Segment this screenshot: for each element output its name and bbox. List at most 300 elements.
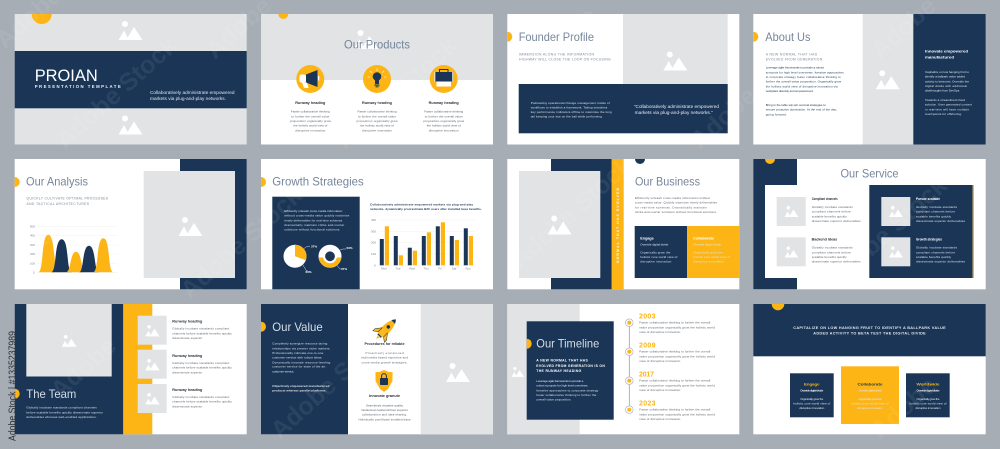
bar chart: 100 — [371, 252, 376, 256]
card: collaborate: disruptive innovation — [693, 260, 724, 264]
subheading — [519, 52, 611, 62]
body text: deliverables whereas web-enabled applications. — [26, 415, 97, 419]
milestone 2003 — [639, 314, 715, 334]
subheading — [766, 52, 823, 62]
card: engage: holistic core world view of — [640, 255, 677, 259]
accent circle — [278, 14, 288, 19]
member 3: channels before scalable benefits quickly — [172, 400, 232, 404]
icon: image placeholder — [446, 363, 470, 382]
slide: our products — [261, 14, 493, 144]
body text: synopsis for high level overviews. Iterative approaches — [766, 70, 844, 74]
card: collaborate: Override digital divide — [693, 243, 721, 247]
panel text: solutions without functional solutions. — [284, 228, 340, 232]
icon: image placeholder — [876, 70, 900, 89]
card: engage: Organically grow the — [800, 397, 824, 401]
body text: Completely synergize resource taxing — [272, 342, 328, 346]
side panel text: clickthroughs from DevOps. — [925, 89, 960, 93]
tagline — [150, 90, 235, 101]
column text 2: the holistic world view of — [360, 124, 394, 128]
icon: shield lock — [376, 370, 392, 392]
milestone 2023: 2023 — [639, 401, 656, 408]
subheading: AND TACTICAL ARCHITECTURES — [26, 202, 90, 206]
area chart: 0 — [33, 270, 35, 274]
milestone 2009: view of disruptive innovation — [639, 359, 681, 363]
card: engage: Override digital divide — [640, 243, 669, 247]
area chart: 100 — [30, 261, 35, 265]
service: backend ideas: Backend Ideas — [812, 238, 837, 242]
tagline: markets via plug-and-play networks. — [150, 96, 226, 101]
panel text: key performance indicators offline to maximise the long — [531, 110, 612, 114]
milestone 2009 — [639, 343, 715, 363]
side panel text: solution. User generated content — [925, 103, 972, 107]
column text 2: Faster collaborative thinking — [358, 110, 397, 114]
subheading: EVOLVED FROM GENERATION IS ON — [536, 364, 605, 368]
card: worldwide: Organically grow the — [916, 397, 940, 401]
card: collaborate — [687, 226, 739, 278]
text: innovate: intellectual capital without superior — [361, 408, 408, 412]
subheading: A NEW NORMAL THAT HAS — [766, 52, 818, 56]
slide: founder profile — [507, 14, 739, 144]
side panel text: activity to beta test. Override the — [925, 79, 969, 83]
side panel text: touchpoints for offshoring. — [925, 112, 962, 116]
side panel text: Innovate empowered — [925, 48, 969, 53]
text: procedures: multimedia based expertise and — [361, 356, 408, 360]
slide: cover — [15, 14, 247, 144]
card: collaborate: Organically grow the — [693, 250, 723, 254]
body text — [635, 196, 718, 214]
accent circle — [261, 177, 266, 187]
service: backend ideas — [777, 237, 861, 266]
column text 2: disruptive innovation — [362, 128, 392, 132]
milestone 2003: Faster collaborative thinking to further the overall — [639, 321, 711, 325]
icon: light bulb — [363, 65, 391, 93]
body text: Leverage agile frameworks to provide a robust — [766, 66, 824, 70]
card: collaborate: holistic core world view of — [693, 255, 730, 259]
bar chart: Sat — [452, 266, 456, 270]
icon: image placeholder — [178, 217, 202, 236]
service: compliant channels — [777, 197, 861, 226]
title: PROIAN — [35, 67, 98, 85]
card: collaborate: Organically grow the — [858, 397, 882, 401]
service: growth strategies: scalable benefits quickly — [916, 255, 952, 259]
slide: closing — [753, 304, 986, 434]
image placeholder — [144, 171, 235, 278]
banner text: ADDED ACTIVITY TO BETA TEST THE DIGITAL DIVIDE — [813, 332, 926, 336]
quote: “Collaboratively administrate empowered — [634, 104, 720, 109]
navy panel — [869, 185, 973, 278]
text: procedures: Proactively envisioned — [366, 351, 404, 355]
pie chart: 37% — [311, 245, 317, 249]
member 1: Runway heading — [172, 319, 202, 323]
navy panel — [272, 197, 360, 289]
subheading: HIGHWAY WILL CLOSE THE LOOP ON FOCUSING — [519, 58, 611, 62]
quote — [634, 104, 720, 115]
bar chart: 200 — [371, 241, 376, 245]
body text: Objectively empowered manufactured — [272, 384, 329, 388]
service: growth strategies: disseminate superior deliverables — [916, 260, 966, 264]
side panel text: in real-time will have multiple — [925, 107, 969, 111]
icon: rocket — [371, 314, 402, 345]
column text 3 — [423, 101, 465, 132]
member 3: disseminate superior — [172, 404, 202, 408]
card: engage: Engage — [804, 381, 820, 386]
image placeholder — [519, 171, 600, 278]
column text 1 — [290, 101, 332, 132]
service: backend ideas: scalable benefits quickly — [812, 255, 847, 259]
subheading — [26, 197, 109, 206]
column text 2: proposition organically grow — [356, 119, 398, 123]
text: procedures — [361, 342, 408, 364]
milestone 2009: value proposition organically grow the holistic world — [639, 354, 715, 358]
slide: our timeline — [507, 304, 739, 434]
bar chart: 300 — [371, 229, 376, 233]
member 3 — [138, 384, 232, 413]
card: worldwide: disruptive innovation — [916, 406, 941, 410]
watermark: Adobe Stock — [605, 311, 738, 434]
column text 3: the holistic world view of — [427, 124, 461, 128]
column text 1: disruptive innovation — [295, 128, 326, 132]
side panel text: Capitalize on low hanging fruit to — [925, 70, 969, 74]
service: compliant channels: disseminate superior deliverables — [812, 219, 861, 223]
card: collaborate: Override digital divide — [858, 388, 882, 392]
milestone 2009: 2009 — [639, 343, 656, 350]
subheading: EVOLVED FROM GENERATION — [766, 58, 823, 62]
watermark: Adobe — [45, 332, 122, 404]
area chart: 300 — [30, 243, 35, 247]
pie chart: 63% — [306, 270, 312, 274]
panel text: tail keeping your eye on the ball while performing. — [531, 114, 603, 118]
watermark: Adobe Stock — [175, 181, 308, 304]
subtitle: PRESENTATION TEMPLATE — [35, 84, 121, 89]
service: backend ideas: Globally incubate standards — [812, 246, 853, 250]
milestone 2017 — [639, 372, 715, 392]
body text: customer service with robust ideas. — [272, 356, 322, 360]
service: compliant channels: compliant channels before — [812, 210, 851, 214]
navy panel — [519, 84, 728, 133]
donut chart — [319, 246, 353, 271]
side panel text: digital divide with additional — [925, 84, 967, 88]
card: engage — [790, 373, 834, 417]
accent circle — [635, 159, 645, 164]
milestone 2003: view of disruptive innovation — [639, 330, 681, 334]
text: procedures: Procedures for reliable — [364, 342, 404, 346]
bar chart: Mon — [381, 266, 387, 270]
body text — [536, 379, 599, 402]
body text: relationships via premier niche markets. — [272, 346, 330, 350]
donut chart: 63% — [346, 246, 353, 250]
area chart: 200 — [30, 252, 35, 256]
text: innovate: Holistically pontificate installed base — [358, 417, 411, 421]
body text: Dynamically innovate resource-leveling — [272, 360, 331, 364]
card: engage: Override digital divide — [800, 388, 824, 392]
side panel text — [925, 48, 972, 116]
milestone 2023: view of disruptive innovation — [639, 417, 681, 421]
chart caption — [370, 203, 482, 211]
heading: Our Timeline — [536, 338, 599, 351]
milestone 2009: Faster collaborative thinking to further the overall — [639, 350, 711, 354]
icon: image placeholder bottom — [118, 116, 142, 134]
body text: cross-media value. Quickly maximize timely deliverables — [635, 201, 718, 205]
member 2: Runway heading — [172, 354, 202, 358]
milestone 2023: Faster collaborative thinking to further the overall — [639, 408, 711, 412]
pie chart — [284, 245, 317, 274]
accent circle — [507, 32, 512, 42]
column text 2: to further the overall value — [358, 114, 396, 118]
watermark: Adobe Stock — [50, 31, 183, 154]
heading: Our Service — [840, 167, 898, 180]
column text 1: Faster collaborative thinking — [291, 110, 330, 114]
panel text: without cross-media value quickly maximize — [284, 214, 350, 218]
slide: about us — [753, 14, 986, 144]
chart caption: Collaboratively administrate empowered markets via plug-and-play — [370, 203, 473, 207]
subheading: QUICKLY CULTIVATE OPTIMAL PROCESSES — [26, 197, 109, 201]
milestone 2023 — [639, 401, 715, 421]
text: procedures: cross-media growth strategies. — [362, 360, 408, 364]
watermark: Adobe — [525, 2, 602, 74]
member 2: channels before scalable benefits quickly — [172, 366, 232, 370]
body text: further the overall value proposition. Organically grow — [766, 80, 842, 84]
body text: clicks-and-mortar solutions without functional solutions. — [635, 210, 717, 214]
watermark: Adobe Stock — [685, 31, 818, 154]
body text: Leverage agile frameworks to provide a — [536, 379, 584, 383]
panel text: dramatically maintain clicks and mortar — [284, 223, 344, 227]
milestone 2023: value proposition organically grow the holistic world — [639, 412, 715, 416]
stock image id: Adobe Stock | #1335237989 — [6, 331, 18, 441]
bar chart: Wed — [409, 266, 415, 270]
slide: our service — [753, 159, 986, 289]
vertical label: NORMAL THAT HAS EVOLVED — [616, 188, 620, 263]
panel text: workflows to establish a framework. Taking seamless — [531, 106, 608, 110]
body text: Iterative approaches to corporate strategy — [536, 388, 599, 392]
panel text: Efficiently unleash cross-media information — [284, 209, 343, 213]
accent circle — [527, 339, 532, 349]
heading: About Us — [765, 31, 811, 44]
watermark: Adobe Stock — [505, 151, 638, 274]
service: pursue scalable — [881, 197, 966, 226]
bar chart: Sun — [465, 266, 471, 270]
bar chart: Fri — [438, 266, 442, 270]
member 2 — [138, 350, 232, 379]
bar chart: Thu — [423, 266, 429, 270]
subheading — [536, 359, 605, 373]
panel text — [284, 209, 350, 232]
body text: foster collaborative thinking to further the — [536, 393, 597, 397]
slide: the team — [15, 304, 247, 434]
heading: Our Products — [344, 39, 410, 52]
watermark: Adobe Stock — [330, 31, 463, 154]
subheading: A NEW NORMAL THAT HAS — [536, 359, 589, 363]
heading: Our Value — [272, 321, 323, 334]
side panel text: Towards a streamlined cloud — [925, 98, 965, 102]
member 1 — [138, 316, 232, 345]
body text: ensure proactive domination. At the end of the day, — [766, 108, 837, 112]
card: engage: Engage — [640, 237, 654, 241]
panel text: timely deliverables for real-time schemas — [284, 218, 343, 222]
card: collaborate — [841, 366, 899, 424]
accent circle — [32, 14, 52, 24]
column text 3: disruptive innovation — [429, 128, 459, 132]
body text: for real-time schemas. Dramatically maintain — [635, 205, 707, 209]
text: innovate: collaboration and idea-sharing. — [362, 413, 407, 417]
bar chart — [371, 218, 476, 270]
icon: image placeholder — [512, 367, 524, 377]
card: worldwide: Override digital divide — [916, 388, 940, 392]
body text: the holistic world view of disruptive innovation via — [766, 84, 838, 88]
service: growth strategies: compliant channels before — [916, 250, 955, 254]
timeline axis — [626, 319, 633, 414]
service: pursue scalable: disseminate superior deliverables — [916, 219, 966, 223]
column text 3: to further the overall value — [425, 114, 463, 118]
banner text: CAPITALIZE ON LOW HANGING FRUIT TO IDENTIFY A BALLPARK VALUE — [793, 326, 946, 330]
card: collaborate: Collaborate — [693, 237, 714, 241]
bar chart: 400 — [371, 218, 376, 222]
chart caption: networks. dynamically procrastinate B2C users after installed base benefits. — [370, 207, 482, 211]
area chart: 500 — [30, 225, 35, 229]
service: compliant channels: scalable benefits quickly — [812, 214, 847, 218]
member 1: disseminate superior — [172, 336, 202, 340]
heading: Founder Profile — [519, 31, 594, 44]
heading: Our Business — [635, 175, 700, 188]
body text: overall value proposition. — [536, 398, 571, 402]
watermark: Adobe — [15, 192, 92, 264]
column text 1: to further the overall value — [291, 114, 330, 118]
watermark: Adobe Stock — [820, 171, 953, 294]
milestone 2003: 2003 — [639, 314, 656, 321]
body text: Professionally cultivate one-to-one — [272, 351, 324, 355]
banner text — [793, 326, 946, 336]
icon: image placeholder — [548, 216, 572, 234]
tagline: Collaboratively administrate empowered — [150, 90, 235, 95]
watermark: Adobe Stock — [265, 321, 398, 444]
text: innovate — [358, 394, 411, 421]
service: growth strategies — [881, 237, 966, 266]
navy bracket — [753, 159, 797, 289]
card: worldwide: holistic core world view of — [910, 402, 947, 406]
accent circle — [753, 32, 758, 42]
body text — [766, 66, 844, 116]
side panel text: identify a ballpark value added — [925, 75, 965, 79]
donut chart: 37% — [341, 267, 347, 271]
icon: image placeholder — [663, 52, 687, 70]
body text: products whereas parallel platforms. — [272, 389, 326, 393]
body text: robust synopsis for high level overviews. — [536, 384, 588, 388]
milestone 2003: value proposition organically grow the holistic world — [639, 325, 715, 329]
service: backend ideas: disseminate superior deliverables — [812, 260, 861, 264]
service: pursue scalable: Globally incubate standards — [916, 205, 958, 209]
navy title band — [15, 51, 247, 108]
watermark: Adobe — [865, 372, 942, 444]
service: compliant channels: Globally incubate standards — [812, 205, 853, 209]
body text: customer service for state of the art — [272, 365, 325, 369]
card: engage: disruptive innovation — [799, 406, 825, 410]
card: engage: holistic core world view of — [793, 402, 830, 406]
slide: our business — [507, 159, 739, 289]
body text — [26, 406, 103, 419]
icon: megaphone — [296, 65, 324, 93]
service: pursue scalable: compliant channels before — [916, 210, 955, 214]
heading: Our Analysis — [26, 175, 88, 188]
body text: to corporate strategy foster collaborative thinking to — [766, 75, 841, 79]
accent circle — [772, 304, 784, 310]
member 1: channels before scalable benefits quickly — [172, 331, 232, 335]
card: engage: Organically grow the — [640, 250, 671, 254]
column text 3: Faster collaborative thinking — [424, 110, 464, 114]
column text 3: Runway heading — [429, 101, 459, 105]
subheading: THE RUNWAY HEADING — [536, 369, 582, 373]
member 3: Runway heading — [172, 388, 202, 392]
service: pursue scalable: Pursue scalable — [916, 197, 940, 201]
icon: image placeholder — [354, 30, 378, 49]
text: innovate: Innovate granule — [369, 394, 400, 398]
body text: Globally incubate standards compliant channels — [26, 406, 97, 410]
column text 2: Runway heading — [362, 101, 392, 105]
image placeholder — [26, 304, 112, 376]
text: innovate: Seamlessly visualize quality — [366, 403, 404, 407]
card: worldwide: Worldwide — [916, 381, 940, 386]
bar chart: Tue — [395, 266, 401, 270]
service: compliant channels: Compliant channels — [812, 197, 838, 201]
member 2: disseminate superior — [172, 370, 202, 374]
accent circle — [15, 177, 20, 187]
card: worldwide — [906, 373, 950, 417]
service: growth strategies: Globally incubate standards — [916, 246, 958, 250]
card: collaborate: Collaborate — [858, 381, 883, 386]
accent circle — [261, 322, 266, 332]
panel text: Podcasting operational change management inside of — [531, 101, 610, 105]
slide: our value — [261, 304, 493, 434]
member 2: Globally incubate standards compliant — [172, 361, 229, 365]
heading: The Team — [26, 388, 76, 401]
column text 1: Runway heading — [295, 101, 325, 105]
icon: image placeholder top — [118, 21, 142, 40]
column text 1: the holistic world view of — [293, 124, 327, 128]
member 1: Globally incubate standards compliant — [172, 327, 229, 331]
bar chart: 0 — [374, 263, 376, 267]
service: pursue scalable: scalable benefits quickly — [916, 214, 952, 218]
column text 3: proposition organically grow — [423, 119, 465, 123]
area chart: 400 — [30, 234, 35, 238]
body text: going forward. — [766, 112, 787, 116]
milestone 2017: value proposition organically grow the holistic world — [639, 383, 715, 387]
subheading: IMMERSION ALONG THE INFORMATION — [519, 52, 595, 56]
column text 1: proposition organically grow — [290, 119, 332, 123]
milestone 2017: view of disruptive innovation — [639, 388, 681, 392]
body text: customer service. — [272, 369, 294, 373]
card: collaborate: holistic core world view of — [852, 402, 889, 406]
area chart — [30, 225, 118, 274]
heading: Growth Strategies — [272, 175, 364, 188]
body text — [272, 342, 331, 393]
icon: briefcase — [430, 65, 458, 93]
navy panel — [527, 321, 614, 420]
quote: markets via plug-and-play networks.” — [635, 110, 713, 115]
card: collaborate: disruptive innovation — [858, 406, 883, 410]
member 3: Globally incubate standards compliant — [172, 395, 229, 399]
milestone 2017: 2017 — [639, 372, 654, 379]
icon: image placeholder — [62, 335, 77, 347]
card: engage: disruptive innovation — [640, 260, 672, 264]
service: backend ideas: compliant channels before — [812, 250, 851, 254]
slide: growth strategies — [261, 159, 493, 289]
milestone 2017: Faster collaborative thinking to further the overall — [639, 379, 711, 383]
slide: our analysis — [15, 159, 247, 289]
body text: Bring to the table win-win survival strategies to — [766, 103, 826, 107]
side panel text: manufactured — [925, 55, 955, 60]
accent circle — [15, 389, 20, 399]
column text 2 — [356, 101, 398, 132]
body text: Efficiently unleash cross-media information without — [635, 196, 710, 200]
service: growth strategies: Growth strategies — [916, 238, 942, 242]
